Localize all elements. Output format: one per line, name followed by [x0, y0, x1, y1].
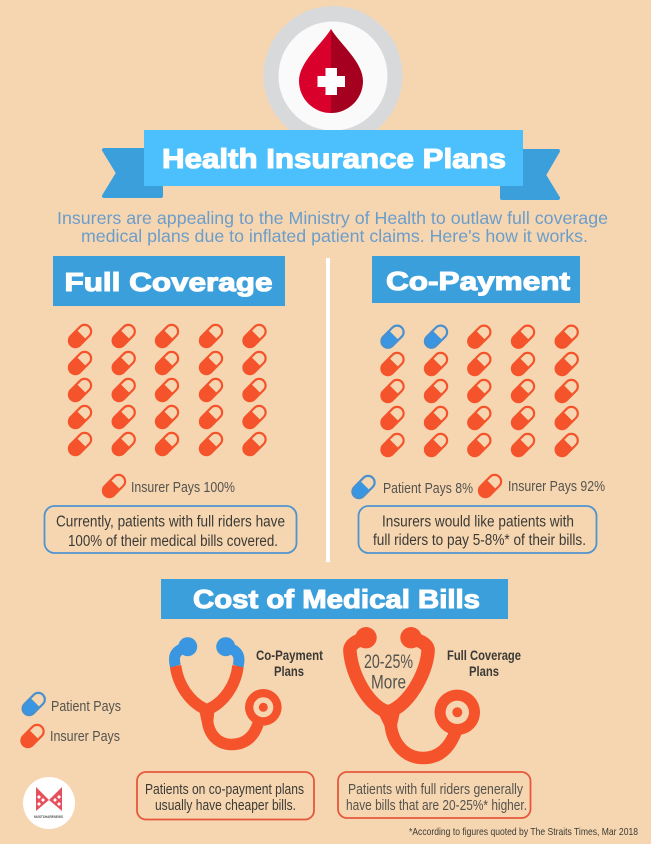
icon: full coverage stethoscope: [350, 627, 480, 758]
legend: insurer pays 100%: [100, 472, 235, 500]
callout: co-payment bills: [137, 772, 314, 820]
label: full coverage plans: [447, 647, 521, 679]
legend: patient pays: [20, 690, 121, 718]
callout: full rider bills: [338, 772, 530, 818]
label: co-payment plans: Co-Payment: [256, 647, 323, 663]
label: co-payment plans: Plans: [274, 663, 304, 679]
icon: blood drop with medical cross: [264, 6, 402, 145]
legend: insurer pays: Insurer Pays: [50, 729, 120, 745]
label: full coverage plans: Plans: [469, 663, 499, 679]
pill grid: full coverage, all insurer paid: [66, 322, 268, 458]
legend: patient pays 8%: [350, 473, 473, 501]
title ribbon banner: [104, 130, 558, 198]
callout: co-payment bills: usually have cheaper bills.: [155, 798, 296, 814]
heading: Cost of Medical Bills: [161, 579, 508, 619]
heading: Co-Payment: Co-Payment: [386, 266, 570, 296]
callout: full coverage explanation: Currently, patients with full riders have: [56, 514, 285, 530]
logo: MustShareNews: [23, 777, 75, 829]
icon: co-payment stethoscope: [174, 637, 282, 744]
heading: Cost of Medical Bills: Cost of Medical Bills: [193, 584, 480, 614]
legend: insurer pays 92%: [476, 472, 605, 500]
label: full coverage plans: Full Coverage: [447, 647, 521, 663]
callout: full coverage explanation: 100% of their medical bills covered.: [68, 533, 278, 550]
callout: full rider bills: Patients with full riders generally: [348, 782, 524, 798]
legend: insurer pays 100%: Insurer Pays 100%: [131, 480, 235, 496]
legend: patient pays: Patient Pays: [51, 699, 121, 715]
label: co-payment plans: [256, 647, 323, 679]
logo: MustShareNews: MUSTSHARENEWS: [34, 815, 64, 819]
callout: co-payment explanation: Insurers would like patients with: [382, 514, 574, 530]
callout: co-payment bills: Patients on co-payment plans: [145, 782, 304, 798]
subtitle text: medical plans due to inflated patient claims. Here's how it works.: [81, 226, 588, 246]
label: 20-25% more: 20-25%: [364, 652, 413, 673]
callout: full rider bills: have bills that are 20-25%* higher.: [346, 798, 527, 814]
subtitle text: [57, 208, 608, 246]
legend: insurer pays 92%: Insurer Pays 92%: [508, 479, 605, 495]
label: 20-25% more: More: [371, 672, 406, 694]
callout: co-payment explanation: [358, 506, 596, 553]
legend: patient pays 8%: Patient Pays 8%: [383, 481, 473, 497]
label: 20-25% more: [364, 652, 413, 694]
heading: Full Coverage: [53, 256, 285, 306]
callout: co-payment explanation: full riders to pay 5-8%* of their bills.: [373, 532, 586, 549]
pill grid: co-payment, two patient paid: [379, 323, 580, 459]
subtitle text: Insurers are appealing to the Ministry of Health to outlaw full coverage: [57, 208, 608, 228]
legend: insurer pays: [19, 722, 120, 750]
heading: Full Coverage: Full Coverage: [64, 267, 272, 297]
title ribbon banner: Health Insurance Plans: [162, 143, 506, 174]
heading: Co-Payment: [372, 256, 580, 303]
callout: full coverage explanation: [44, 506, 296, 553]
